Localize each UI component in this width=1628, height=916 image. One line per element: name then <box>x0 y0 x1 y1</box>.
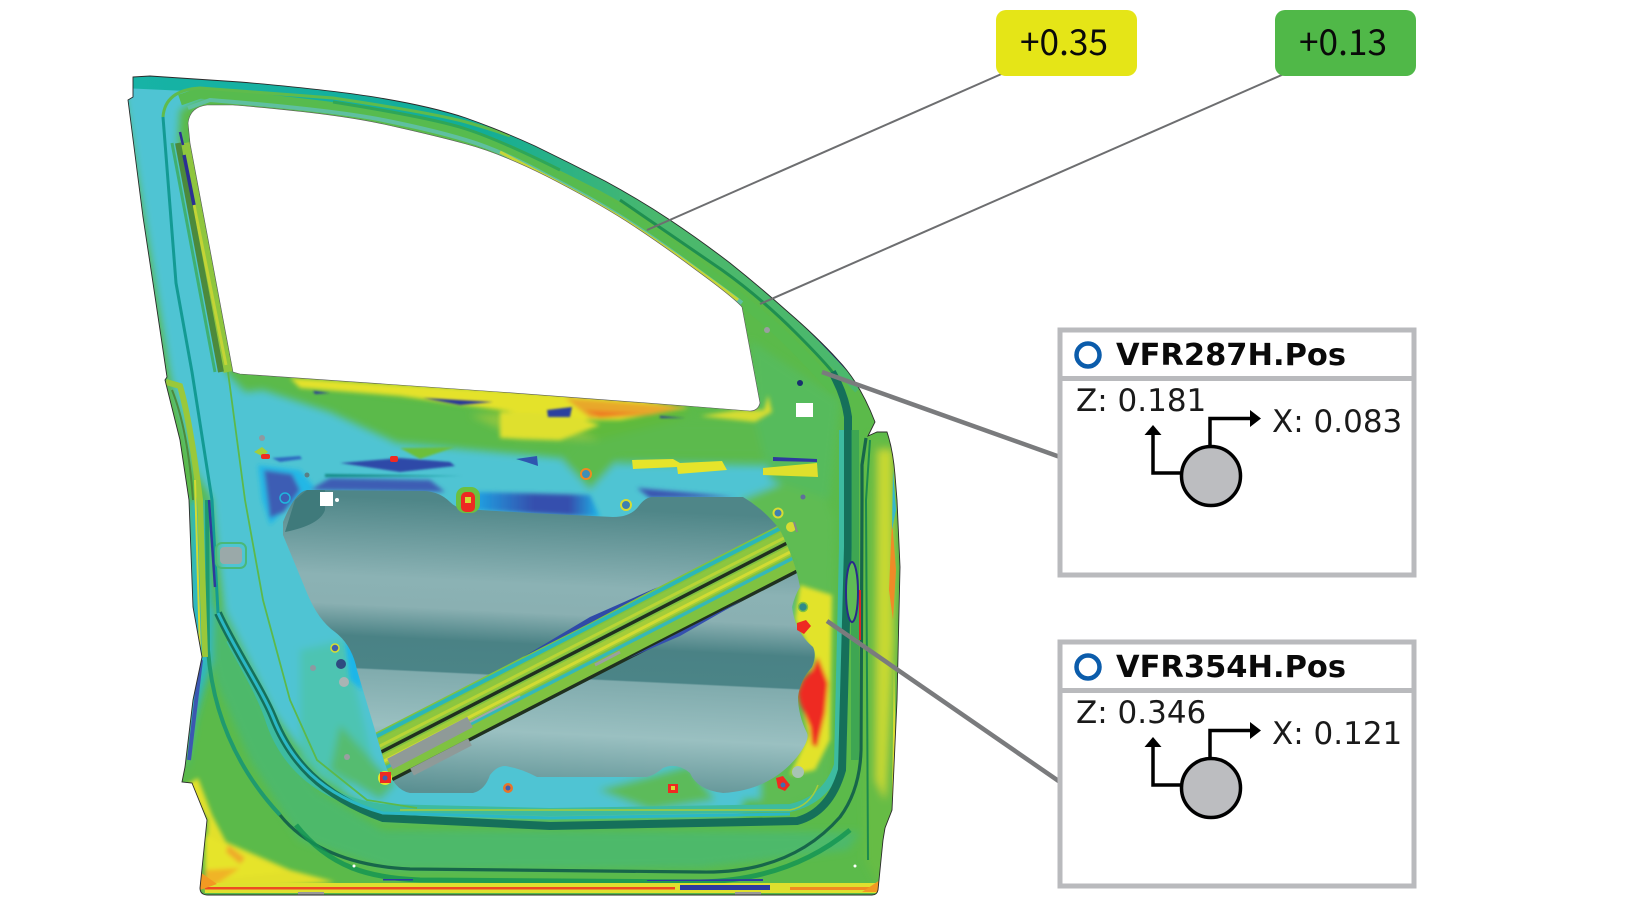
yellow around red patch <box>790 585 832 775</box>
right lobe shading <box>889 520 896 620</box>
yellow sill <box>290 378 688 420</box>
pillar lower strips <box>166 382 205 657</box>
icon: blue ring <box>1076 344 1100 366</box>
glass behind door opening <box>283 490 815 793</box>
X arrow <box>1210 410 1261 446</box>
panel: VFR287H.Pos <box>1060 330 1414 575</box>
icon: blue ring <box>1076 656 1100 678</box>
divider <box>1060 376 1414 381</box>
door deviation colour map <box>120 70 910 900</box>
second dark channel <box>207 500 280 815</box>
X arrow <box>1210 722 1261 758</box>
X value: X: 0.083 <box>1272 404 1402 440</box>
sharp yellow patches <box>632 459 727 474</box>
leader line to +0.35 <box>647 72 1006 230</box>
leader line to VFR287H panel <box>822 372 1060 457</box>
soft colour regions <box>120 70 900 890</box>
corner orange <box>226 845 245 864</box>
blue deviation streaks <box>340 458 455 472</box>
X value: X: 0.121 <box>1272 716 1402 752</box>
badge: +0.13 <box>1275 10 1416 76</box>
leader line to VFR354H panel <box>827 621 1060 782</box>
divider <box>1060 688 1414 693</box>
fixing points <box>254 327 856 868</box>
Z value: Z: 0.181 <box>1076 383 1206 419</box>
badge: +0.35 <box>996 10 1137 76</box>
main dark channel <box>163 88 510 136</box>
badge: +0.13: +0.13 <box>1299 14 1387 66</box>
panel title: VFR287H.Pos <box>1116 338 1346 373</box>
Z arrow <box>1144 425 1181 473</box>
panel title: VFR354H.Pos <box>1116 650 1346 685</box>
window opening <box>188 105 760 411</box>
panel: VFR354H.Pos <box>1060 642 1414 886</box>
diagonal reinforcement bar <box>376 526 797 781</box>
top frame bands <box>133 82 860 388</box>
badge: +0.35: +0.35 <box>1020 14 1108 66</box>
Z arrow <box>1144 737 1181 785</box>
blue halos <box>258 465 315 525</box>
door slot <box>846 562 858 622</box>
position circle <box>1182 758 1240 818</box>
door outline <box>128 76 900 895</box>
infographic canvas <box>128 10 1416 896</box>
Z value: Z: 0.346 <box>1076 695 1206 731</box>
position circle <box>1182 446 1240 506</box>
leader line to +0.13 <box>760 74 1284 304</box>
green rib in inner panel <box>400 447 455 459</box>
door hole left <box>220 547 242 564</box>
inner green rib <box>228 372 417 808</box>
corner yellow <box>186 778 335 892</box>
window side strips <box>185 143 228 372</box>
door body <box>120 70 910 900</box>
bottom sill strip <box>205 883 885 893</box>
